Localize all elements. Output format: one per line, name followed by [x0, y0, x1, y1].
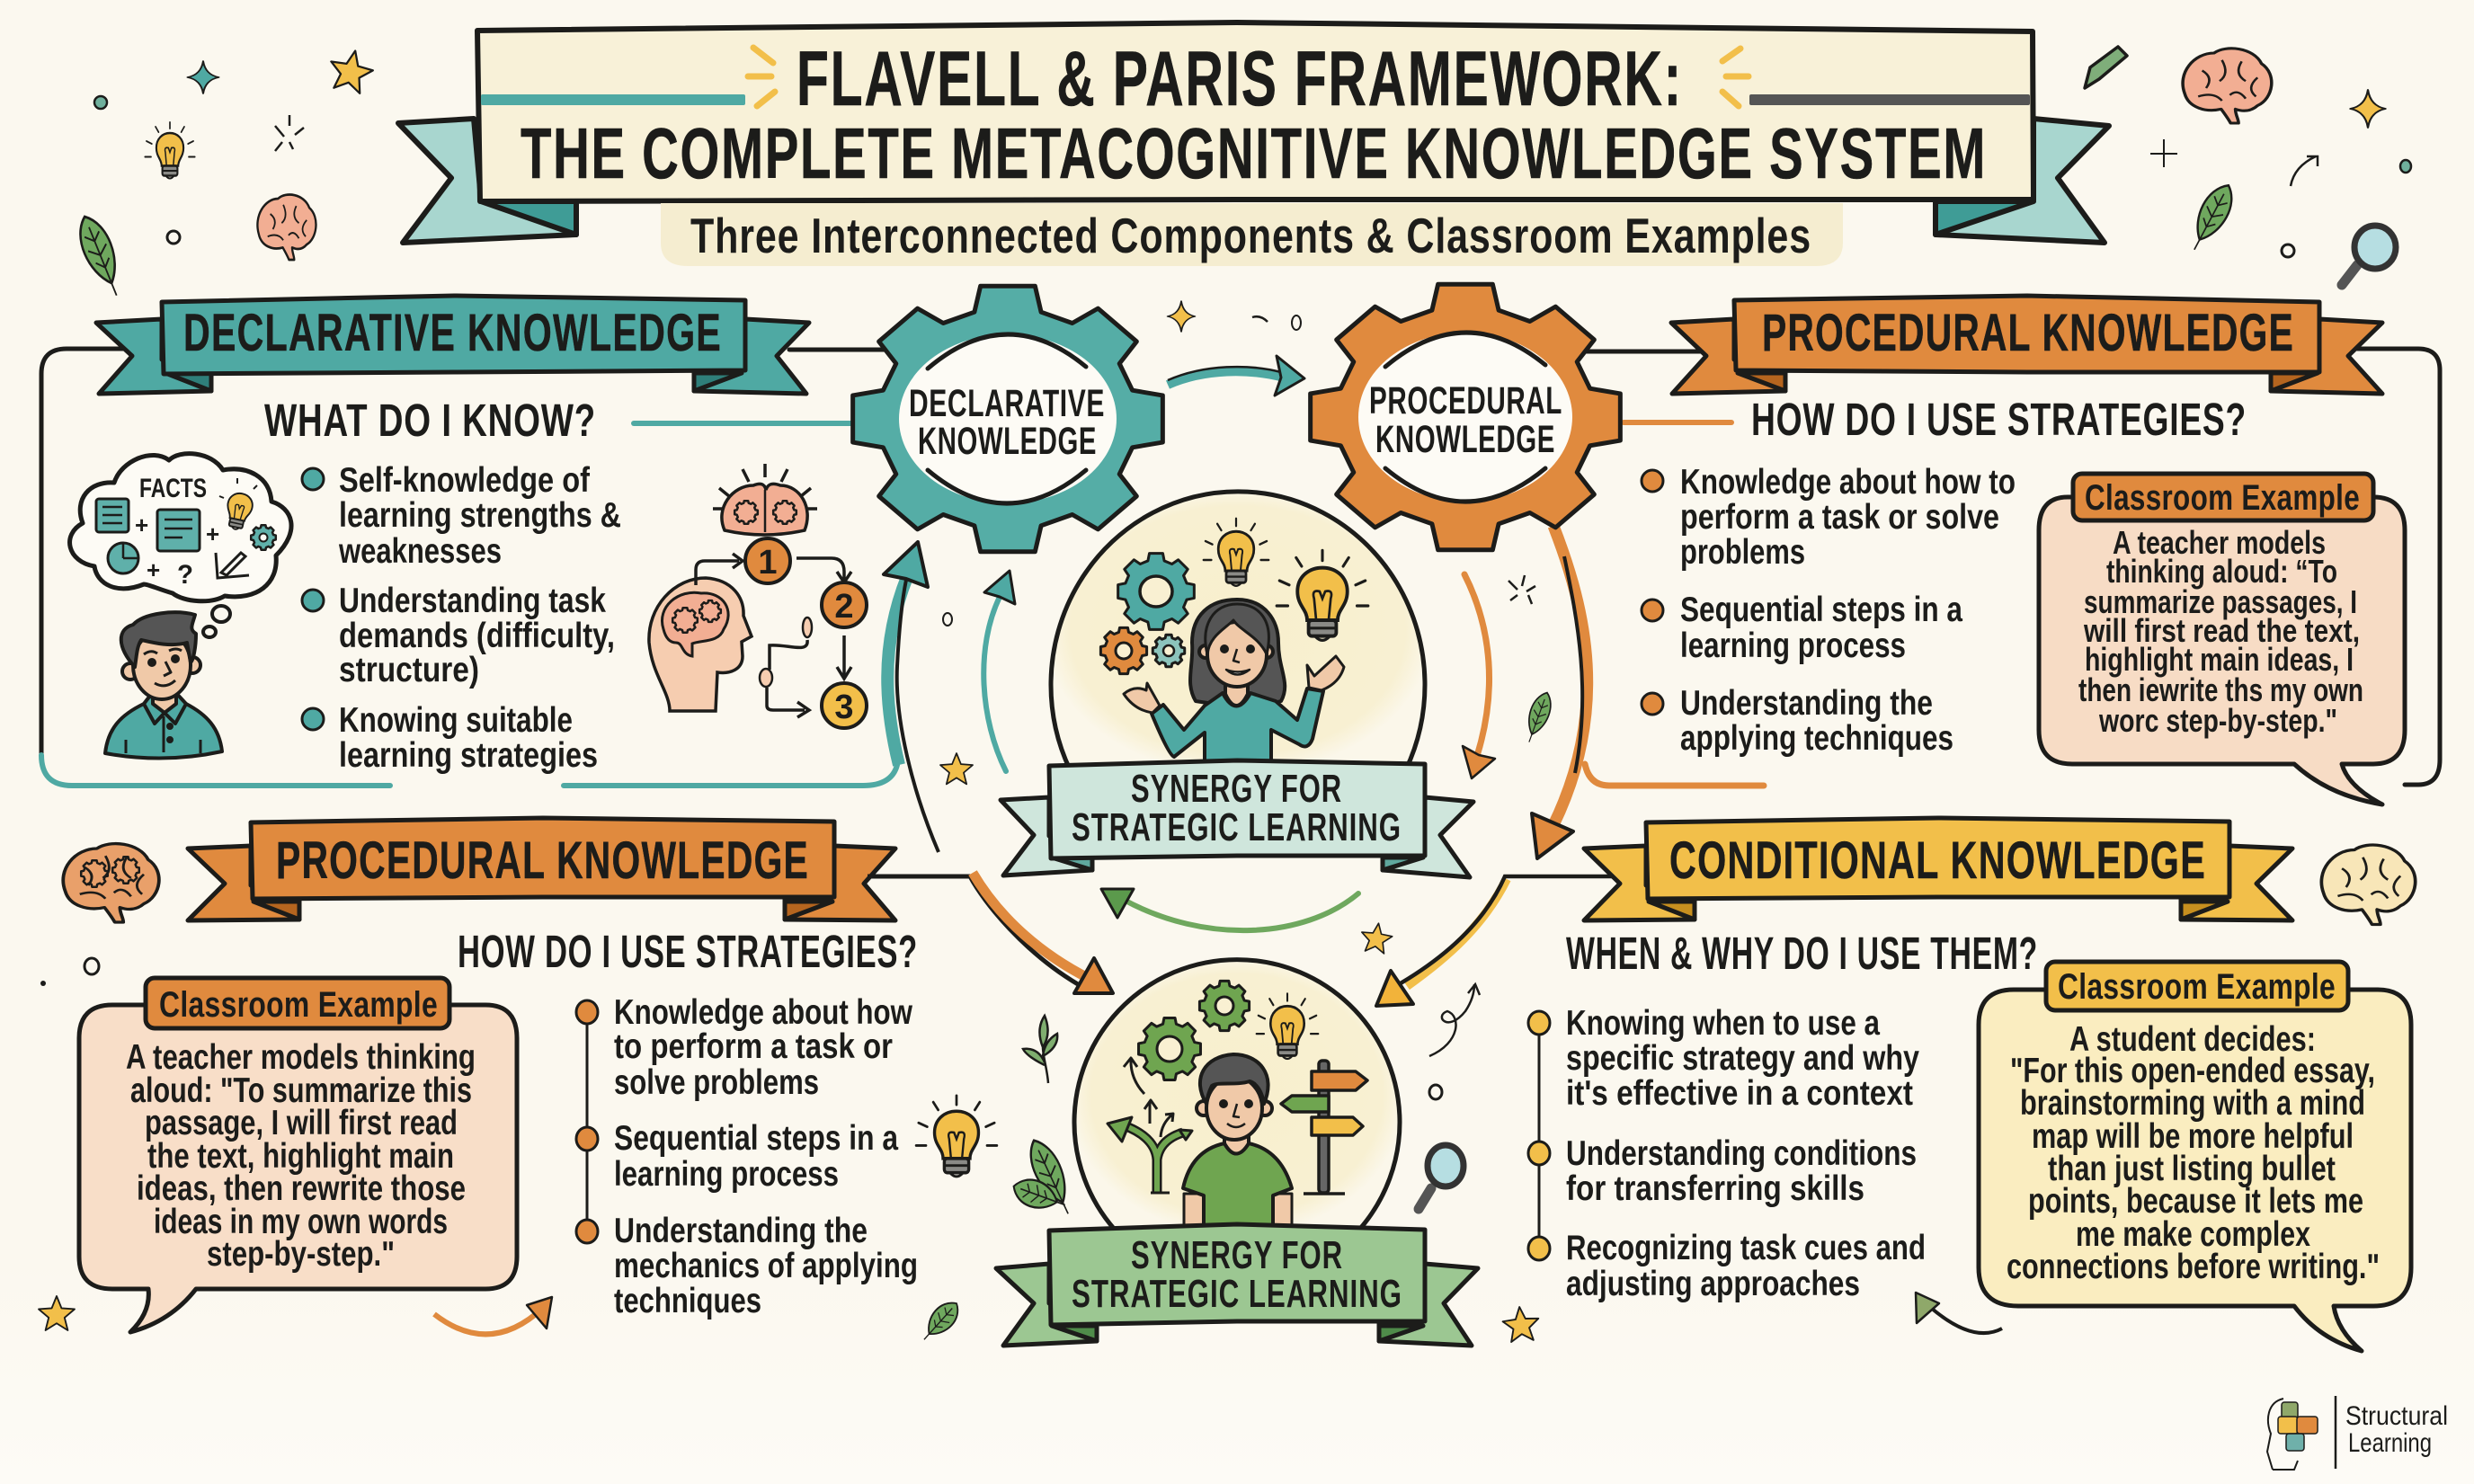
bullet timeline: adjusting approaches [1566, 1265, 1860, 1303]
gear: procedural knowledge: PROCEDURAL [1369, 379, 1562, 422]
callout: classroom example: me make complex [2076, 1215, 2310, 1254]
icon: thought cloud of facts [70, 454, 291, 601]
callout: classroom example: than just listing bullet [2048, 1150, 2336, 1188]
synergy ribbon top: STRATEGIC LEARNING [1072, 805, 1402, 849]
callout: classroom example: connections before writing." [2007, 1248, 2380, 1286]
logo: Structural Learning: Structural [2345, 1401, 2448, 1431]
title banner [477, 22, 2033, 201]
gear: declarative knowledge: KNOWLEDGE [918, 420, 1097, 463]
callout: classroom example: Classroom Example [2058, 967, 2336, 1007]
icon: thought cloud of facts: + [135, 511, 148, 538]
callout: classroom example: brainstorming with a mind [2020, 1084, 2365, 1123]
synergy ribbon top: SYNERGY FOR [1131, 767, 1342, 811]
bullet timeline: Knowing when to use a [1566, 1004, 1880, 1043]
bullet list [1642, 463, 2016, 758]
icon: gears and bulbs [1100, 519, 1368, 674]
question heading: HOW DO I USE STRATEGIES? [1751, 394, 2247, 445]
arrow: green small curved [1916, 1293, 2002, 1333]
gear: declarative knowledge: DECLARATIVE [909, 382, 1105, 425]
callout: classroom example: will first read the text, [2083, 612, 2360, 649]
arrow: orange large downward arrow [1532, 526, 1588, 858]
arrow: orange to lower dome [868, 873, 1113, 993]
procedural ribbon banner: PROCEDURAL KNOWLEDGE [276, 831, 809, 890]
icon: head with numbered steps: 1 [758, 544, 778, 582]
bullet timeline: learning process [614, 1155, 839, 1194]
arrow: teal large upward arrow [884, 542, 939, 852]
bullet timeline: Knowledge about how [614, 993, 913, 1032]
arrow: orange inner downward arrow [1463, 574, 1495, 778]
bullet list: learning strengths & [339, 496, 621, 535]
question heading: WHAT DO I KNOW? [264, 395, 596, 446]
icon: brain with gears [713, 464, 817, 535]
arrow: orange small curved [434, 1297, 552, 1334]
bullet list: Sequential steps in a [1680, 591, 1962, 629]
bullet timeline: specific strategy and why [1566, 1039, 1919, 1078]
title ribbon tails [398, 119, 2109, 243]
conditional ribbon banner [1584, 818, 2292, 920]
callout: classroom example: step-by-step." [207, 1235, 395, 1274]
conditional ribbon banner: CONDITIONAL KNOWLEDGE [1669, 831, 2206, 890]
subtitle pill: Three Interconnected Components & Classroom Examples [690, 208, 1811, 263]
icon: head with numbered steps: 3 [834, 689, 854, 726]
bullet list: learning strategies [339, 736, 598, 775]
bullet timeline: techniques [614, 1282, 761, 1320]
callout: classroom example: worc step-by-step." [2098, 702, 2337, 739]
callout: classroom example: highlight main ideas, I [2085, 641, 2354, 678]
icon: thought cloud of facts: + [147, 556, 160, 583]
callout: classroom example: summarize passages, I [2084, 583, 2357, 620]
panel: procedural knowledge (top right) [1584, 296, 2440, 804]
icon: light bulb [916, 1096, 997, 1177]
arrow: green return arc [1101, 889, 1358, 930]
bullet timeline: Understanding the [614, 1212, 868, 1250]
gear: procedural knowledge [1311, 284, 1620, 550]
synergy ribbon bottom: STRATEGIC LEARNING [1072, 1272, 1402, 1316]
callout: classroom example: Classroom Example [159, 985, 438, 1025]
logo: Structural Learning [2267, 1396, 2448, 1470]
bullet list: Knowledge about how to [1680, 463, 2016, 502]
bullet timeline: solve problems [614, 1063, 819, 1102]
bullet timeline: Understanding conditions [1566, 1134, 1917, 1173]
synergy ribbon top [1001, 760, 1473, 877]
callout: classroom example: thinking aloud: “To [2106, 553, 2337, 590]
decorative doodles top-right [2085, 47, 2411, 285]
arrow: teal inner upward arrow [983, 571, 1015, 771]
synergy ribbon bottom: SYNERGY FOR [1131, 1233, 1343, 1277]
panel border lines [1584, 349, 2440, 786]
callout: classroom example: ideas in my own words [154, 1203, 448, 1241]
decorative doodles centre and lower [39, 301, 1556, 1346]
icon: cream brain [2321, 845, 2416, 924]
callout: classroom example [79, 978, 517, 1332]
callout: classroom example: A teacher models thinking [126, 1038, 476, 1077]
callout: classroom example: aloud: "To summarize this [130, 1071, 472, 1110]
bullet list: perform a task or solve [1680, 498, 1999, 537]
bullet timeline: for transferring skills [1566, 1169, 1864, 1208]
procedural ribbon banner [188, 818, 895, 920]
declarative ribbon banner [96, 296, 809, 394]
arrow: teal between gears [1168, 356, 1304, 395]
title banner: FLAVELL & PARIS FRAMEWORK: [796, 36, 1683, 122]
icon: signpost [1281, 1061, 1367, 1194]
callout: classroom example [1979, 962, 2411, 1351]
dome: girl illustration [1051, 492, 1425, 769]
synergy ribbon bottom [996, 1224, 1478, 1346]
bullet timeline [1528, 1004, 1926, 1303]
callout: classroom example: then iewrite ths my own [2078, 671, 2363, 708]
decorative doodles top-left [72, 47, 376, 300]
bullet list: Knowing suitable [339, 701, 573, 740]
panel border lines [41, 349, 897, 786]
icon: orange brain [63, 844, 159, 922]
arrow: yellow to lower dome [1376, 876, 1614, 1006]
callout: classroom example: passage, I will first read [145, 1104, 458, 1142]
panel: declarative knowledge [41, 296, 897, 786]
bullet timeline: Sequential steps in a [614, 1119, 898, 1158]
icon: head with numbered steps: 2 [834, 588, 854, 626]
question heading [1621, 394, 2247, 445]
icon: branching arrows [1108, 1058, 1192, 1193]
question heading: WHEN & WHY DO I USE THEM? [1566, 928, 2038, 979]
bullet timeline [576, 993, 918, 1320]
icon: head with numbered steps [649, 538, 867, 728]
bullet list: weaknesses [338, 532, 502, 571]
gear: procedural knowledge: KNOWLEDGE [1375, 418, 1555, 461]
icon: teacher figure [1124, 600, 1344, 764]
bullet list: structure) [339, 651, 479, 689]
callout: classroom example: ideas, then rewrite those [137, 1169, 466, 1208]
panel: conditional knowledge [1376, 818, 2416, 1351]
declarative ribbon banner: DECLARATIVE KNOWLEDGE [183, 304, 722, 362]
callout: classroom example: Classroom Example [2085, 478, 2360, 518]
icon: boy figure [1183, 1054, 1292, 1227]
icon: thought cloud of facts: ? [177, 560, 193, 590]
callout: classroom example: the text, highlight main [147, 1137, 454, 1176]
bullet list: learning process [1680, 626, 1906, 665]
procedural ribbon banner [1671, 296, 2382, 394]
callout: classroom example: "For this open-ended essay, [2010, 1052, 2375, 1090]
callout: classroom example: A student decides: [2069, 1020, 2316, 1059]
icon: gears and bulb [1139, 981, 1318, 1080]
callout: classroom example [2039, 474, 2405, 804]
callout: classroom example: A teacher models [2113, 524, 2326, 561]
dome: boy illustration [1074, 960, 1400, 1230]
bullet list: applying techniques [1680, 719, 1953, 758]
bullet timeline: Recognizing task cues and [1566, 1229, 1926, 1267]
icon: thinking student [105, 606, 230, 759]
bullet list: demands (difficulty, [339, 617, 615, 655]
bullet list: Understanding the [1680, 684, 1933, 723]
callout: classroom example: points, because it lets me [2028, 1182, 2363, 1221]
question heading: HOW DO I USE STRATEGIES? [458, 926, 918, 977]
callout: classroom example: map will be more helpful [2032, 1117, 2354, 1156]
bullet timeline: mechanics of applying [614, 1247, 918, 1285]
logo: Structural Learning: Learning [2348, 1428, 2432, 1458]
panel: procedural knowledge (bottom left) [63, 818, 997, 1334]
bullet list: problems [1680, 533, 1805, 572]
icon: thought cloud of facts: + [206, 520, 219, 547]
bullet timeline: to perform a task or [614, 1027, 893, 1066]
icon: thought cloud of facts: FACTS [139, 474, 207, 503]
bullet list [302, 461, 621, 775]
bullet timeline: it's effective in a context [1566, 1074, 1913, 1113]
bullet list: Self-knowledge of [339, 461, 591, 500]
gear: declarative knowledge [853, 286, 1162, 552]
bullet list: Understanding task [339, 582, 606, 620]
